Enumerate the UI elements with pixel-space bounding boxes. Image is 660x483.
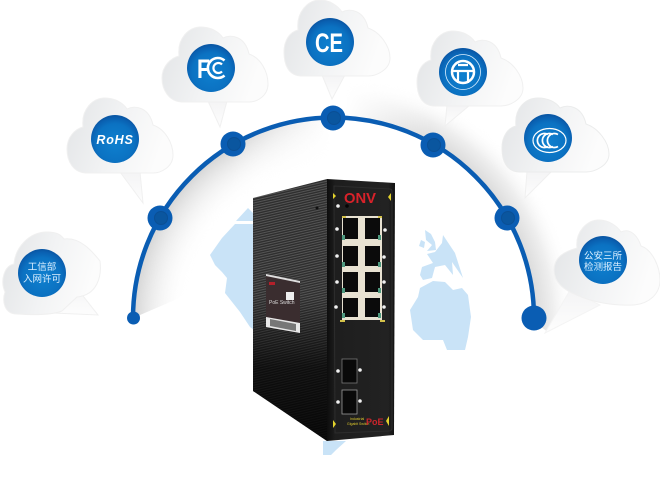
cloud: RoHS bbox=[67, 98, 173, 203]
badge: CE: CE bbox=[315, 28, 343, 58]
arc shadow: right, outside the arc bbox=[366, 104, 560, 330]
SFP ports bbox=[342, 359, 357, 414]
badge: CCC bbox=[524, 114, 572, 162]
product label bbox=[266, 274, 300, 333]
brand logo: ONV bbox=[344, 190, 376, 207]
badge: MIIT network licence: 工信部 bbox=[28, 261, 56, 273]
switch side panel bbox=[253, 179, 327, 441]
badge: FCC bbox=[187, 44, 235, 92]
badge: police institute report: 公安三所 bbox=[584, 250, 622, 262]
switch device bbox=[253, 179, 395, 441]
status LEDs bbox=[334, 204, 387, 404]
model text: Gigabit Switch bbox=[347, 422, 369, 426]
cloud: police institute bbox=[545, 220, 660, 333]
badge: police institute report: 检测报告 bbox=[584, 261, 622, 273]
corner markers bbox=[333, 193, 391, 428]
cloud: FCC bbox=[162, 27, 268, 127]
cloud: MIIT bbox=[3, 232, 100, 315]
badge: police institute report bbox=[579, 236, 627, 284]
badge: RoHS: RoHS bbox=[96, 133, 134, 147]
arc shadow: left, inside the arc bbox=[135, 122, 310, 315]
badge: FCC: F bbox=[197, 54, 210, 84]
world map bbox=[210, 208, 471, 455]
badge: RoHS bbox=[91, 115, 139, 163]
model text: Industrial bbox=[350, 417, 364, 421]
badge: CE bbox=[306, 18, 354, 66]
model text bbox=[347, 417, 369, 426]
cloud: test centre mark bbox=[417, 31, 523, 126]
switch front panel bbox=[327, 179, 395, 441]
RJ45 ports bbox=[340, 216, 385, 322]
badge: MIIT network licence: 入网许可 bbox=[23, 273, 61, 285]
badge: MIIT network licence bbox=[18, 249, 66, 297]
PoE mark: PoE bbox=[366, 417, 384, 427]
product label: PoE Switch bbox=[269, 300, 295, 306]
cloud: CCC bbox=[502, 98, 609, 198]
arc nodes bbox=[127, 106, 546, 330]
badge: test centre emblem bbox=[439, 48, 487, 96]
arc bbox=[133, 118, 534, 318]
cloud: CE bbox=[284, 0, 390, 99]
